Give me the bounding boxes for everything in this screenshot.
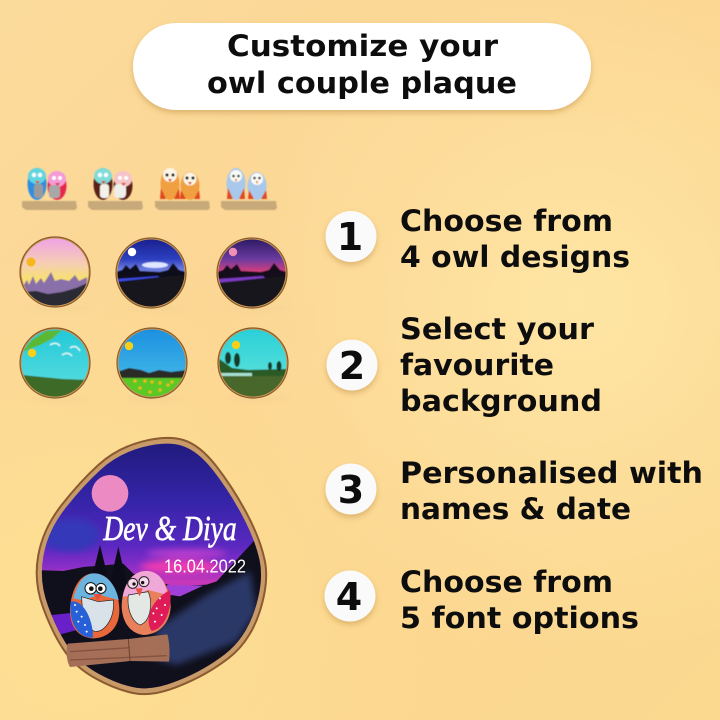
title: Customize your bbox=[227, 29, 499, 63]
step 4 text: Choose from bbox=[400, 565, 613, 599]
owl design 3 bbox=[155, 168, 210, 210]
step 1 text: 4 owl designs bbox=[400, 240, 630, 274]
step 4 bbox=[324, 565, 639, 635]
background 6: river landscape bbox=[218, 328, 288, 400]
step 3 bbox=[326, 456, 703, 526]
ground shadows bbox=[28, 306, 290, 401]
background 5: flower field bbox=[117, 328, 187, 400]
step 1 bbox=[326, 204, 630, 274]
step 2 text: background bbox=[400, 384, 602, 418]
number badge 1: 1 bbox=[337, 215, 363, 259]
number badge 2 bbox=[326, 340, 378, 390]
step 3 text bbox=[400, 456, 703, 526]
owl design options bbox=[22, 168, 277, 210]
step 4 text bbox=[400, 565, 639, 635]
number badge 3: 3 bbox=[338, 468, 364, 512]
date: 16.04.2022 bbox=[164, 555, 246, 576]
title line 2: owl couple plaque bbox=[207, 66, 517, 100]
background 2: blue night bbox=[116, 238, 186, 310]
wood bark rim bbox=[37, 438, 266, 694]
step 1 text: Choose from bbox=[400, 204, 613, 238]
pink owl bbox=[122, 571, 171, 635]
number badge 2: 2 bbox=[339, 344, 365, 388]
number badge 4 bbox=[324, 570, 376, 622]
step 2 text bbox=[400, 312, 602, 418]
owl design 4 bbox=[221, 168, 277, 210]
moon bbox=[92, 475, 128, 512]
painted purple night scene bbox=[42, 444, 261, 688]
background 4: leafy meadow bbox=[20, 328, 90, 400]
step 3 text: names & date bbox=[400, 492, 631, 526]
main owl couple plaque bbox=[36, 436, 268, 696]
step 2 bbox=[326, 312, 602, 418]
wooden log perch bbox=[67, 634, 170, 667]
title pill bbox=[133, 23, 591, 110]
background options bbox=[20, 237, 290, 401]
step 2 text: favourite bbox=[400, 348, 554, 382]
steps list bbox=[324, 204, 703, 635]
names: Dev & Diya bbox=[103, 510, 237, 548]
blue owl bbox=[70, 573, 119, 638]
step 3 text: Personalised with bbox=[400, 456, 703, 490]
pine trees bbox=[94, 545, 122, 566]
number badge 1 bbox=[326, 211, 376, 262]
owl design 1 bbox=[22, 168, 77, 210]
step 1 text bbox=[400, 204, 630, 274]
number badge 3 bbox=[326, 464, 376, 514]
step 4 text: 5 font options bbox=[400, 601, 639, 635]
step 2 text: Select your bbox=[400, 312, 595, 346]
number badge 4: 4 bbox=[336, 575, 362, 619]
background 3: purple night bbox=[217, 238, 287, 310]
owl design 2 bbox=[88, 168, 143, 210]
background 1: pink yellow dusk bbox=[20, 237, 90, 317]
